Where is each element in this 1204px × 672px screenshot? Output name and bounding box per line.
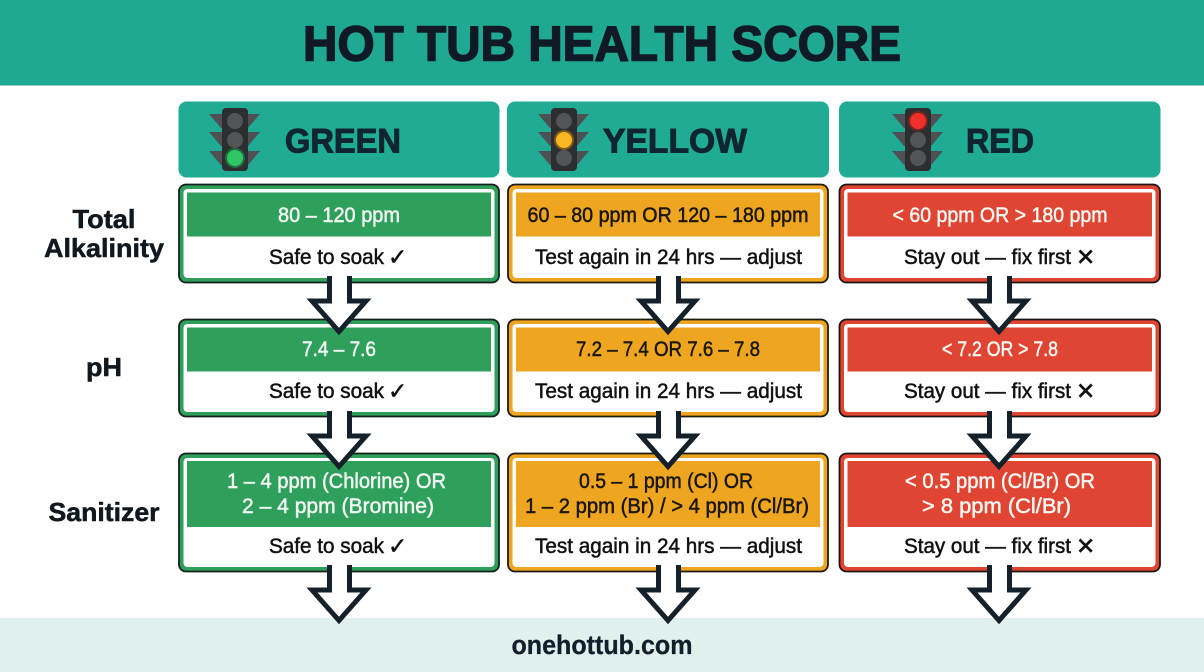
card: pH green bbox=[179, 320, 499, 416]
card: pH green: Safe to soak bbox=[269, 380, 384, 403]
arrow: green pH to sanitizer bbox=[312, 411, 366, 466]
arrow: green sanitizer exit bbox=[312, 565, 366, 620]
card: pH red bbox=[840, 320, 1160, 416]
card: sanitizer red: ✕ bbox=[1076, 534, 1095, 560]
arrow: red alkalinity to pH bbox=[972, 276, 1026, 332]
card: sanitizer green: ✓ bbox=[388, 534, 407, 560]
card: sanitizer green: Safe to soak bbox=[269, 535, 384, 558]
card: sanitizer red: Stay out — fix first bbox=[904, 535, 1071, 558]
column header: green: GREEN bbox=[285, 122, 401, 160]
column header: yellow bbox=[507, 102, 829, 178]
card: pH red: ✕ bbox=[1076, 379, 1095, 405]
arrow: red sanitizer exit bbox=[972, 565, 1026, 620]
title banner bbox=[0, 0, 1204, 86]
arrow: yellow sanitizer exit bbox=[641, 565, 695, 620]
arrow: green alkalinity to pH bbox=[312, 276, 366, 332]
card: sanitizer green bbox=[179, 454, 499, 572]
card: alkalinity green: Safe to soak bbox=[269, 246, 384, 269]
icon: traffic light green bbox=[209, 108, 260, 171]
row label: Total Alkalinity bbox=[44, 204, 165, 263]
footer: onehottub.com bbox=[512, 630, 692, 660]
card: sanitizer yellow: 1 – 2 ppm (Br) / > 4 ppm (Cl/Br) bbox=[525, 495, 809, 518]
card: alkalinity green: 80 – 120 ppm bbox=[278, 204, 400, 227]
arrow: red pH to sanitizer bbox=[972, 411, 1026, 466]
column header: red bbox=[839, 102, 1160, 178]
card: pH green: 7.4 – 7.6 bbox=[302, 338, 376, 361]
card: pH red: < 7.2 OR > 7.8 bbox=[942, 338, 1058, 361]
card: pH red: Stay out — fix first bbox=[904, 380, 1071, 403]
card: alkalinity red: Stay out — fix first bbox=[904, 246, 1071, 269]
card: sanitizer green: 1 – 4 ppm (Chlorine) OR bbox=[227, 470, 446, 493]
card: sanitizer red: > 8 ppm (Cl/Br) bbox=[922, 495, 1071, 518]
card: sanitizer yellow bbox=[508, 454, 828, 572]
arrow: yellow pH to sanitizer bbox=[641, 411, 695, 466]
card: alkalinity yellow: Test again in 24 hrs — adjust bbox=[535, 246, 802, 269]
icon: traffic light red bbox=[892, 108, 943, 171]
card: sanitizer red bbox=[840, 454, 1160, 572]
column header: yellow: YELLOW bbox=[603, 122, 748, 160]
row label: pH: pH bbox=[86, 352, 122, 382]
icon: traffic light yellow bbox=[538, 108, 589, 171]
card: sanitizer yellow: 0.5 – 1 ppm (Cl) OR bbox=[579, 470, 753, 493]
card: alkalinity green: ✓ bbox=[388, 245, 407, 271]
card: pH yellow: 7.2 – 7.4 OR 7.6 – 7.8 bbox=[576, 338, 760, 361]
column header: red: RED bbox=[966, 122, 1034, 160]
card: alkalinity green bbox=[179, 184, 499, 282]
card: alkalinity red: ✕ bbox=[1076, 245, 1095, 271]
card: alkalinity red bbox=[840, 184, 1160, 282]
arrow: yellow alkalinity to pH bbox=[641, 276, 695, 332]
card: alkalinity yellow bbox=[508, 184, 828, 282]
card: alkalinity yellow: 60 – 80 ppm OR 120 – 180 ppm bbox=[528, 204, 808, 227]
title banner: HOT TUB HEALTH SCORE bbox=[303, 18, 901, 72]
card: sanitizer green: 2 – 4 ppm (Bromine) bbox=[242, 495, 434, 518]
card: sanitizer yellow: Test again in 24 hrs — adjust bbox=[535, 535, 802, 558]
card: pH green: ✓ bbox=[388, 379, 407, 405]
card: sanitizer red: < 0.5 ppm (Cl/Br) OR bbox=[905, 470, 1095, 493]
card: pH yellow: Test again in 24 hrs — adjust bbox=[535, 380, 802, 403]
card: pH yellow bbox=[508, 320, 828, 416]
column header: green bbox=[178, 102, 500, 178]
row label: Total Alkalinity: Alkalinity bbox=[44, 233, 165, 263]
card: alkalinity red: < 60 ppm OR > 180 ppm bbox=[892, 204, 1108, 227]
row label: Sanitizer: Sanitizer bbox=[48, 497, 160, 527]
row label: Total Alkalinity: Total bbox=[72, 204, 136, 234]
footer bbox=[0, 618, 1204, 672]
